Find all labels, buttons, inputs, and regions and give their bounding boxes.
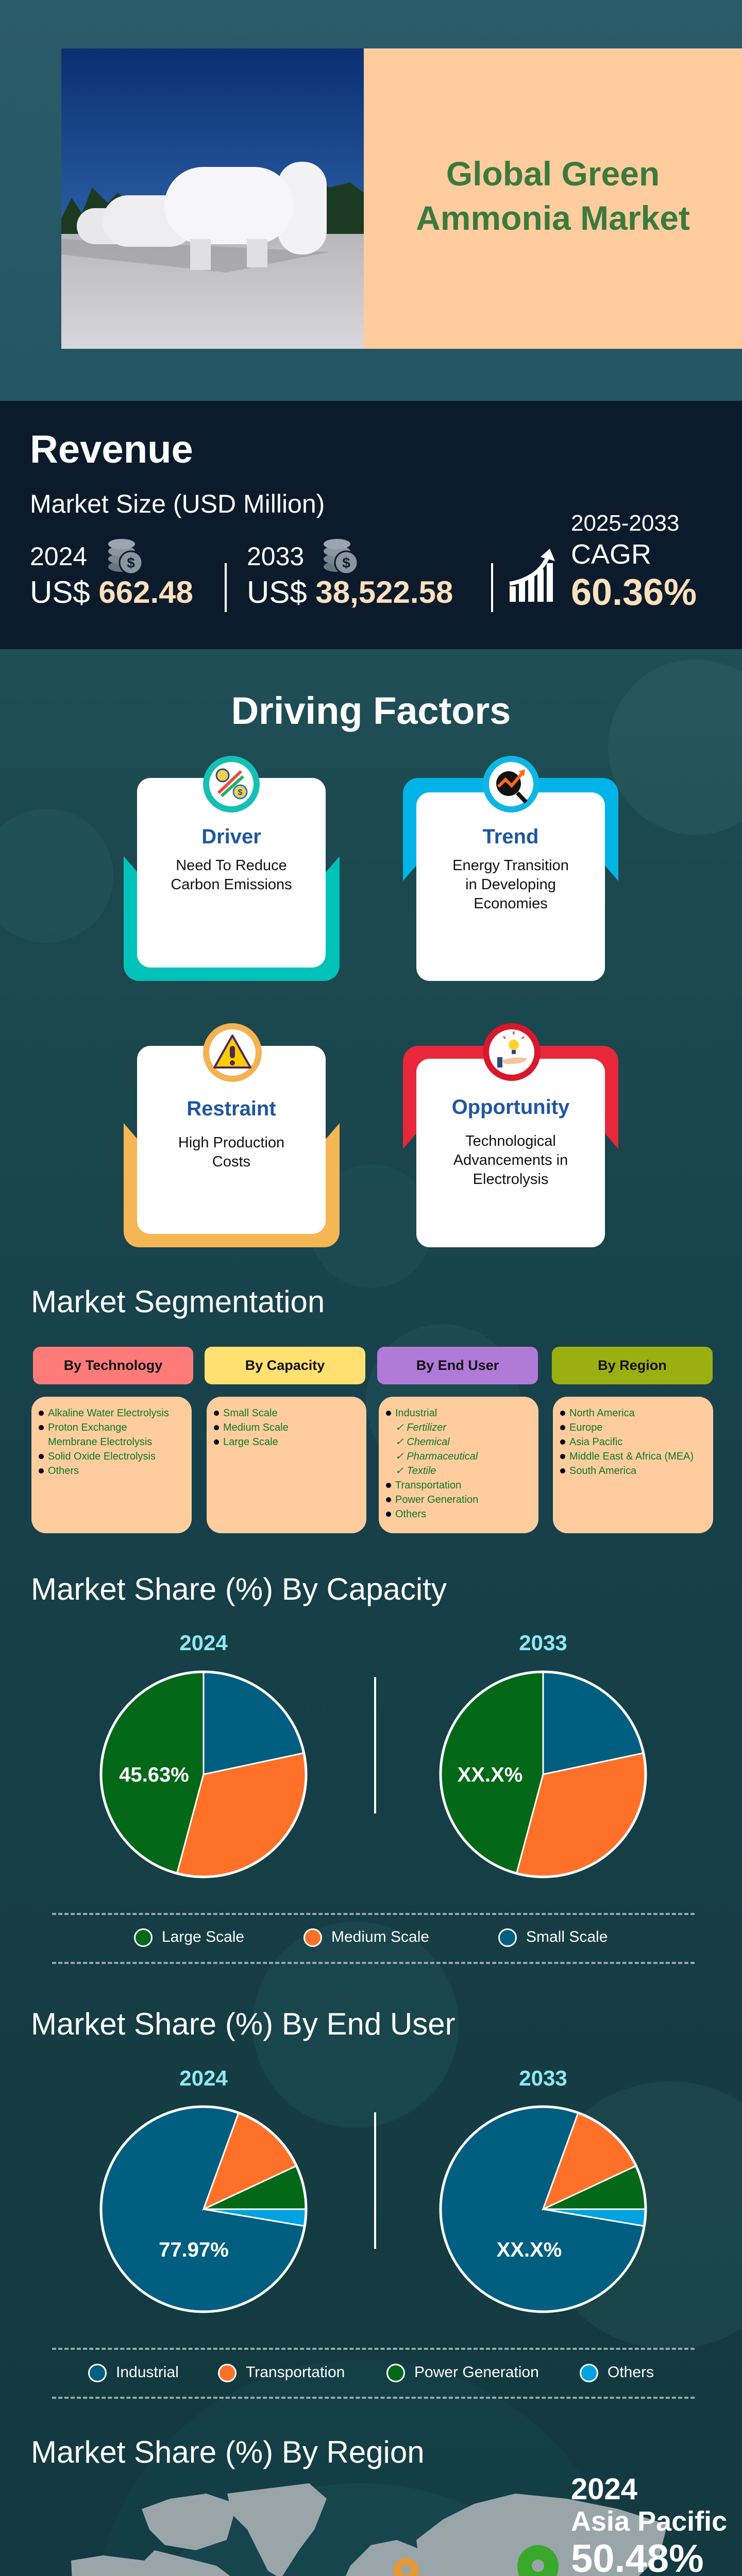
pie chart: capacity: 45.63% bbox=[119, 1764, 189, 1786]
value 2033 bbox=[247, 539, 453, 609]
value 2024: 2024 bbox=[30, 542, 87, 571]
header: by capacity: By Capacity bbox=[245, 1358, 325, 1373]
list: capacity: Small Scale bbox=[223, 1408, 278, 1419]
header: by end user bbox=[377, 1347, 538, 1384]
list: technology: Membrane Electrolysis bbox=[48, 1436, 152, 1448]
pie chart: end user: 77.97% bbox=[159, 2239, 229, 2261]
heading: share by end user: Market Share (%) By End User bbox=[31, 2007, 456, 2041]
icon: opportunity bbox=[483, 1023, 541, 1081]
list: region: Middle East & Africa (MEA) bbox=[569, 1451, 694, 1462]
pie chart: capacity: XX.X% bbox=[458, 1764, 522, 1786]
pie chart: capacity bbox=[100, 1670, 647, 1878]
panel: opportunity: Opportunity bbox=[452, 1096, 569, 1118]
panel: opportunity: Advancements in bbox=[453, 1152, 568, 1168]
panel: trend bbox=[403, 756, 618, 981]
list: end user bbox=[379, 1397, 538, 1533]
pie chart: end user bbox=[100, 2105, 647, 2313]
panel: opportunity bbox=[403, 1023, 618, 1247]
header: by technology: By Technology bbox=[64, 1358, 162, 1373]
panel: restraint: High Production bbox=[178, 1134, 284, 1151]
text: 2033 bbox=[519, 2066, 567, 2090]
list: end user: Power Generation bbox=[395, 1494, 478, 1505]
list: end user: Others bbox=[395, 1509, 426, 1520]
icon: coins bbox=[108, 539, 141, 573]
legend: capacity: Large Scale bbox=[162, 1928, 244, 1945]
list: end user: ✓ Pharmaceutical bbox=[395, 1451, 478, 1462]
legend: end user: Industrial bbox=[116, 2364, 179, 2381]
icon: coins: $ bbox=[342, 555, 350, 571]
market size label: Market Size (USD Million) bbox=[30, 489, 325, 518]
value 2024 bbox=[30, 539, 193, 609]
CAGR: 2025-2033 bbox=[571, 511, 679, 536]
panel: restraint: Restraint bbox=[187, 1097, 276, 1120]
panel: driver bbox=[124, 756, 340, 981]
list: technology: Alkaline Water Electrolysis bbox=[48, 1408, 169, 1419]
heading: driving factors: Driving Factors bbox=[231, 689, 511, 732]
list: region bbox=[553, 1397, 713, 1533]
list: end user: ✓ Textile bbox=[395, 1465, 436, 1477]
CAGR bbox=[571, 511, 697, 613]
list: capacity bbox=[207, 1397, 366, 1533]
list: technology bbox=[31, 1397, 192, 1533]
value 2024: US$ 662.48 bbox=[30, 575, 193, 609]
pie chart: end user: XX.X% bbox=[497, 2239, 562, 2261]
panel: driver: Driver bbox=[201, 825, 261, 848]
legend: end user bbox=[88, 2364, 654, 2382]
hero photo bbox=[61, 48, 364, 349]
panel: driver: Need To Reduce bbox=[176, 857, 287, 874]
panel: restraint bbox=[124, 1023, 340, 1247]
header: by region: By Region bbox=[598, 1358, 667, 1373]
list: end user: Industrial bbox=[395, 1408, 437, 1419]
world map bbox=[71, 2483, 667, 2576]
panel: trend: Trend bbox=[483, 825, 538, 848]
panel: opportunity: Electrolysis bbox=[473, 1171, 548, 1188]
revenue band bbox=[0, 401, 742, 649]
value 2033: 2033 bbox=[247, 542, 304, 571]
legend: end user: Transportation bbox=[246, 2364, 345, 2381]
heading: market segmentation: Market Segmentation bbox=[31, 1284, 325, 1319]
revenue heading: Revenue bbox=[30, 428, 193, 471]
panel: opportunity: Technological bbox=[465, 1133, 556, 1149]
list: region: Asia Pacific bbox=[569, 1436, 622, 1448]
text: 2033 bbox=[519, 1631, 567, 1655]
list: technology: Proton Exchange bbox=[48, 1422, 127, 1433]
header: by end user: By End User bbox=[416, 1358, 499, 1373]
icon: coins: $ bbox=[127, 555, 135, 571]
list: end user: ✓ Fertilizer bbox=[395, 1422, 446, 1433]
text: 2024 bbox=[179, 2066, 228, 2090]
text: 2024 bbox=[179, 1631, 228, 1655]
panel: trend: in Developing bbox=[465, 876, 556, 893]
panel: restraint: Costs bbox=[212, 1154, 250, 1170]
callout: asia pacific: 2024 bbox=[571, 2472, 637, 2506]
title panel: Ammonia Market bbox=[416, 199, 690, 237]
legend: capacity: Medium Scale bbox=[331, 1928, 429, 1945]
list: region: North America bbox=[569, 1408, 635, 1419]
icon: growth chart bbox=[509, 549, 555, 602]
panel: driver: Carbon Emissions bbox=[171, 876, 292, 893]
legend: capacity bbox=[134, 1928, 608, 1947]
icon: warning bbox=[203, 1023, 262, 1082]
list: capacity: Large Scale bbox=[223, 1436, 278, 1448]
panel: trend: Economies bbox=[474, 895, 548, 912]
CAGR: 60.36% bbox=[571, 572, 697, 613]
header: by region bbox=[552, 1347, 713, 1384]
list: capacity: Medium Scale bbox=[223, 1422, 289, 1433]
value 2033: US$ 38,522.58 bbox=[247, 575, 453, 609]
callout: asia pacific: Asia Pacific bbox=[571, 2506, 727, 2537]
list: region: Europe bbox=[569, 1422, 603, 1433]
icon: coins bbox=[324, 539, 357, 573]
heading: share by region: Market Share (%) By Region bbox=[31, 2435, 425, 2469]
legend: end user: Power Generation bbox=[414, 2364, 539, 2381]
segmentation headers bbox=[33, 1347, 713, 1384]
callout: asia pacific bbox=[571, 2472, 727, 2576]
title panel: Global Green bbox=[446, 155, 660, 193]
icon: driver: $ bbox=[238, 788, 243, 797]
list: end user: Transportation bbox=[395, 1480, 461, 1491]
heading: share by capacity: Market Share (%) By Capacity bbox=[31, 1572, 447, 1606]
list: region: South America bbox=[569, 1465, 636, 1477]
header: by technology bbox=[33, 1347, 193, 1384]
title panel bbox=[364, 48, 742, 349]
panel: trend: Energy Transition bbox=[452, 857, 569, 874]
list: end user: ✓ Chemical bbox=[395, 1436, 450, 1448]
header: by capacity bbox=[205, 1347, 365, 1384]
icon: driver bbox=[203, 756, 260, 812]
CAGR: CAGR bbox=[571, 539, 651, 570]
legend: end user: Others bbox=[608, 2364, 654, 2381]
list: technology: Solid Oxide Electrolysis bbox=[48, 1451, 156, 1462]
legend: capacity: Small Scale bbox=[526, 1928, 608, 1945]
icon: trend bbox=[483, 756, 539, 812]
list: technology: Others bbox=[48, 1465, 79, 1477]
